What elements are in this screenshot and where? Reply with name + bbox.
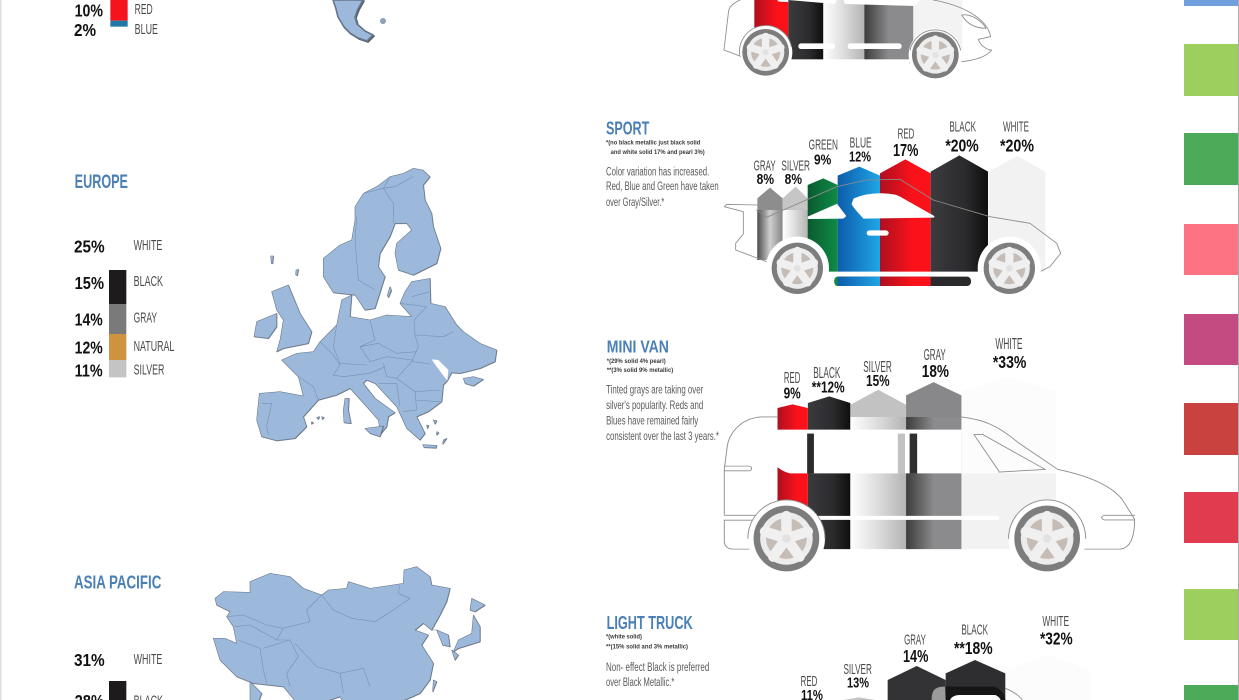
value labels: 8%: [757, 172, 774, 188]
wheels: [748, 500, 1086, 577]
panel: light truck: [606, 612, 1090, 700]
value labels: WHITE: [995, 337, 1022, 353]
colour names: [134, 237, 174, 379]
value labels: 13%: [847, 675, 869, 691]
legend values: [74, 650, 163, 700]
description: Red, Blue and Green have taken: [606, 179, 719, 193]
legend values: 2%: [74, 20, 96, 40]
value labels: GRAY: [924, 347, 946, 364]
description: silver's popularity. Reds and: [606, 398, 703, 412]
percent values: 11%: [75, 361, 103, 381]
legend values: WHITE: [134, 651, 162, 668]
side moulding: [724, 516, 999, 520]
percent values: [74, 237, 105, 381]
car outline: [1005, 688, 1022, 699]
footnote: *(white solid): [606, 635, 642, 641]
footnote: and white solid 17% and pearl 3%): [611, 150, 705, 156]
description: consistent over the last 3 years.*: [606, 429, 719, 443]
value labels: BLACK: [813, 366, 841, 382]
country borders: [262, 177, 453, 435]
footnote: [607, 358, 673, 374]
stacked bar: [109, 270, 126, 377]
footnote: *(29% solid 4% pearl): [607, 358, 666, 365]
description: [606, 660, 709, 689]
value labels: [801, 614, 1073, 700]
value labels: SILVER: [863, 360, 892, 376]
colour arrows: [757, 155, 1045, 272]
description: over Black Metallic.*: [606, 675, 675, 689]
heading: mini van: MINI VAN: [607, 336, 669, 356]
heading: sport: SPORT: [606, 118, 650, 139]
footnote: *(no black metallic just black solid: [606, 140, 701, 146]
legend values: 31%: [74, 650, 105, 670]
colour names: NATURAL: [134, 338, 174, 355]
colour bands: [754, 0, 962, 59]
windows: [809, 194, 933, 235]
description: [606, 383, 719, 443]
percent values: 14%: [75, 309, 103, 329]
value labels: *32%: [1040, 629, 1073, 649]
van outline: [724, 417, 1135, 549]
value labels: *20%: [1000, 135, 1034, 155]
value labels: WHITE: [1042, 614, 1069, 630]
value labels: 8%: [785, 172, 802, 188]
value labels: GREEN: [809, 137, 838, 153]
value labels: GRAY: [904, 633, 926, 649]
value labels: 12%: [849, 149, 871, 165]
door handles: [798, 43, 902, 49]
value labels: *33%: [993, 351, 1027, 372]
heading: light truck: LIGHT TRUCK: [607, 612, 693, 633]
colour names: GRAY: [134, 309, 157, 326]
panel: Asia Pacific legend: [74, 572, 163, 700]
wheels: [739, 26, 962, 82]
footnote: **(15% solid and 3% metallic): [606, 644, 688, 650]
heading: Asia Pacific: ASIA PACIFIC: [74, 572, 161, 593]
value labels: 15%: [866, 373, 890, 390]
description: over Gray/Silver.*: [606, 195, 665, 209]
value labels: 14%: [903, 646, 928, 666]
value labels: BLACK: [961, 623, 988, 639]
value labels: [784, 337, 1027, 403]
percent values: 25%: [74, 237, 105, 257]
colour arrows: [843, 655, 1090, 700]
legend values: 10%: [75, 1, 103, 21]
legend values: [74, 1, 158, 40]
legend values: RED: [135, 1, 153, 18]
percent values: 15%: [75, 273, 104, 293]
car outline: [724, 0, 992, 63]
value labels: [754, 120, 1034, 188]
colour names: WHITE: [134, 237, 162, 254]
colour swatch strip: [1184, 0, 1238, 700]
value labels: SILVER: [781, 159, 810, 175]
value labels: WHITE: [1003, 120, 1029, 136]
legend bar: red and blue: [110, 0, 128, 27]
value labels: 18%: [922, 361, 949, 381]
description: Tinted grays are taking over: [606, 383, 703, 396]
colour names: SILVER: [134, 362, 164, 379]
value labels: BLACK: [949, 120, 976, 136]
description: [606, 164, 719, 209]
sill bar: [834, 277, 971, 286]
panel: top car: [724, 0, 992, 82]
panel: South America legend remainder: [74, 0, 158, 40]
description: Non- effect Black is preferred: [606, 660, 709, 674]
heading: Europe: EUROPE: [75, 172, 128, 193]
value labels: **12%: [812, 380, 845, 396]
car outline: [724, 179, 1061, 272]
country borders: [227, 585, 437, 693]
legend values: BLUE: [135, 21, 158, 38]
value labels: SILVER: [843, 662, 872, 678]
value labels: 9%: [784, 386, 801, 403]
value labels: RED: [898, 127, 914, 143]
value labels: *20%: [945, 135, 979, 155]
windows: [777, 0, 920, 6]
colour names: BLACK: [134, 273, 163, 290]
percent values: 12%: [75, 338, 103, 358]
footnote: **(3% solid 9% metallic): [607, 367, 673, 374]
value labels: RED: [801, 674, 817, 690]
map: southern tip of South America: [333, 0, 386, 41]
colour arrows: [777, 376, 1056, 549]
value labels: GRAY: [754, 159, 776, 175]
footnote: [606, 635, 688, 650]
windows: [770, 430, 961, 473]
black bar: [109, 681, 126, 700]
map: Europe: [254, 168, 497, 448]
wheels: [766, 237, 1041, 300]
value labels: 17%: [893, 140, 918, 160]
panel: mini van: [606, 336, 1135, 577]
value labels: **18%: [954, 638, 993, 658]
value labels: 9%: [814, 152, 831, 168]
description: Color variation has increased.: [606, 164, 709, 178]
description: Blues have remained fairly: [606, 414, 698, 427]
map: Asia Pacific: [213, 567, 485, 700]
footnote: [606, 140, 705, 156]
value labels: RED: [784, 371, 800, 387]
panel: sport: [606, 118, 1061, 300]
Europe legend and bar: [74, 237, 174, 381]
value labels: BLUE: [850, 136, 872, 152]
